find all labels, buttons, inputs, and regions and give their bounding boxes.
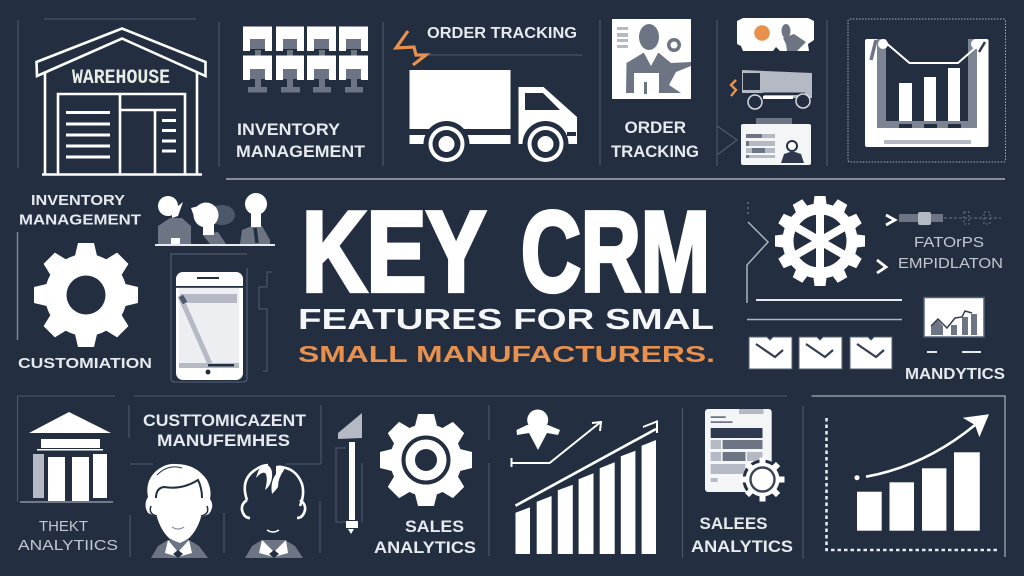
title: Key CRM: CRM xyxy=(521,189,710,316)
icon: large gear xyxy=(34,243,138,347)
label: thekt analytiics xyxy=(18,518,118,554)
label: custtomicazent manufemhes: CUSTTOMICAZENT xyxy=(143,412,306,430)
icon: mini truck xyxy=(742,70,812,109)
icon: lightning bolt xyxy=(396,31,426,65)
icon: portrait light face xyxy=(146,464,212,558)
small gear xyxy=(740,458,784,502)
label: inventory management: MANAGEMENT xyxy=(236,143,365,161)
label: sales analytics: SALES xyxy=(405,518,464,536)
label: order tracking: ORDER xyxy=(624,119,686,137)
label: inventory management: INVENTORY xyxy=(237,121,340,139)
warehouse sign: WAREHOUSE xyxy=(72,67,170,90)
panel: dotted chart frame xyxy=(848,19,1006,162)
label: fatorps empidlaton: FATOrPS xyxy=(914,235,984,251)
label: inventory management left xyxy=(19,192,141,228)
icon: portrait dark face xyxy=(242,465,305,558)
icon: message card xyxy=(737,18,814,51)
label: sales analytics: ANALYTICS xyxy=(374,539,476,557)
label: salees analytics xyxy=(691,515,793,556)
icon: small analytics chart xyxy=(924,298,984,352)
label: sales analytics xyxy=(374,518,476,557)
icon: inventory monitor grid xyxy=(243,26,368,92)
icon: orange spark xyxy=(731,80,736,96)
icon: report document with gear xyxy=(705,409,784,502)
subtitle: features for small: FEATURES FOR SMAL xyxy=(298,304,714,336)
icon: wheel gear with connector xyxy=(747,196,865,303)
chart: rising bars with arrows xyxy=(512,410,657,554)
subtitle: small manufacturers: SMALL MANUFACTURERS. xyxy=(298,341,715,367)
chart: bars with growth curve xyxy=(826,414,1000,550)
label: fatorps empidlaton: EMPIDLATON xyxy=(898,256,1003,272)
label: inventory management left: INVENTORY xyxy=(31,192,125,209)
label: thekt analytiics: THEKT xyxy=(39,518,88,535)
icon: smartphone xyxy=(171,254,272,382)
icon: pencil tool xyxy=(336,413,362,534)
label: inventory management xyxy=(236,121,365,161)
icon: bottom gear xyxy=(380,414,472,506)
label: customiation: CUSTOMIATION xyxy=(18,355,152,372)
label: order tracking: TRACKING xyxy=(611,143,699,161)
icon: warehouse xyxy=(36,28,206,174)
icon: chevron xyxy=(717,126,737,155)
icon: bank building xyxy=(20,412,113,502)
icon: three trend cards xyxy=(749,337,892,369)
label: custtomicazent manufemhes: MANUFEMHES xyxy=(157,432,290,450)
icon: delivery truck xyxy=(410,70,577,167)
label: thekt analytiics: ANALYTIICS xyxy=(18,537,118,554)
icon: person at laptop card xyxy=(612,19,691,99)
title: Key CRM xyxy=(302,189,710,316)
label: custtomicazent manufemhes xyxy=(143,412,306,450)
icon: three people at desk xyxy=(155,193,275,245)
label: salees analytics: ANALYTICS xyxy=(691,538,793,556)
label: inventory management left: MANAGEMENT xyxy=(19,212,141,228)
label: fatorps empidlaton xyxy=(898,235,1003,272)
icon: profile document card xyxy=(741,118,811,165)
icon: settings slider xyxy=(877,212,1001,273)
label: order tracking xyxy=(611,119,699,161)
label: salees analytics: SALEES xyxy=(700,515,768,533)
title: Key CRM: KEY xyxy=(302,189,486,316)
label: order tracking header: ORDER TRACKING xyxy=(427,25,577,42)
label: mandytics: MANDYTICS xyxy=(905,366,1005,383)
